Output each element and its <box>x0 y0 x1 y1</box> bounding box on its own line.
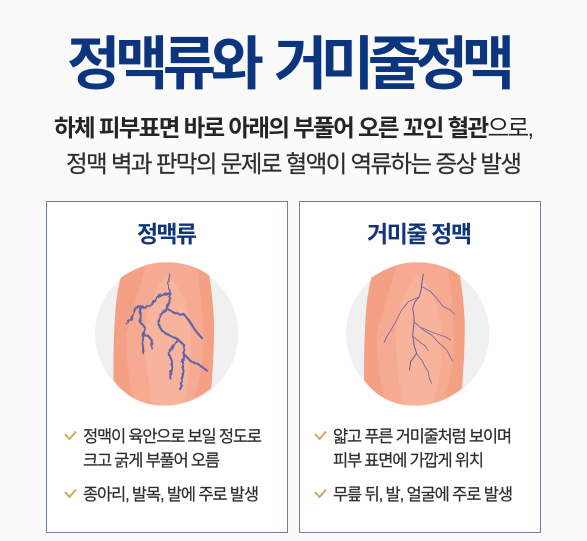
spider vein network <box>384 274 454 383</box>
icon: check <box>315 432 326 439</box>
varicose vein network <box>127 274 207 389</box>
bullet text continuation: 피부 표면에 가깝게 위치 <box>333 451 484 470</box>
icon: check <box>65 490 76 497</box>
title: 정맥류와 <box>67 32 264 97</box>
icon: check <box>65 432 76 439</box>
heading: 정맥류: 정맥류 <box>137 221 197 247</box>
bullet text: 종아리, 발목, 발에 주로 발생 <box>83 485 259 504</box>
subtitle text block: 정맥 벽과 판막의 문제로 혈액이 역류하는 증상 발생 <box>66 151 522 177</box>
title: 거미줄정맥 <box>274 32 515 97</box>
bullet list <box>65 427 262 504</box>
illustration: varicose veins leg <box>95 258 238 408</box>
subtitle text block <box>54 115 534 177</box>
bullet text continuation: 크고 굵게 부풀어 오름 <box>83 451 220 470</box>
subtitle text block: 하체 피부표면 바로 아래의 부풀어 오른 꼬인 혈관으로, <box>54 115 534 141</box>
bullet text: 얇고 푸른 거미줄처럼 보이며 <box>333 427 512 446</box>
bullet list <box>315 427 513 504</box>
heading: 거미줄 정맥: 거미줄 정맥 <box>367 221 472 247</box>
illustration: spider veins leg <box>346 258 489 408</box>
panel: 정맥류 <box>46 202 288 532</box>
bullet text: 무릎 뒤, 발, 얼굴에 주로 발생 <box>333 485 513 504</box>
icon: check <box>315 490 326 497</box>
bullet text: 정맥이 육안으로 보일 정도로 <box>83 427 262 446</box>
panel: 거미줄 정맥 <box>300 202 540 532</box>
title <box>67 32 515 97</box>
